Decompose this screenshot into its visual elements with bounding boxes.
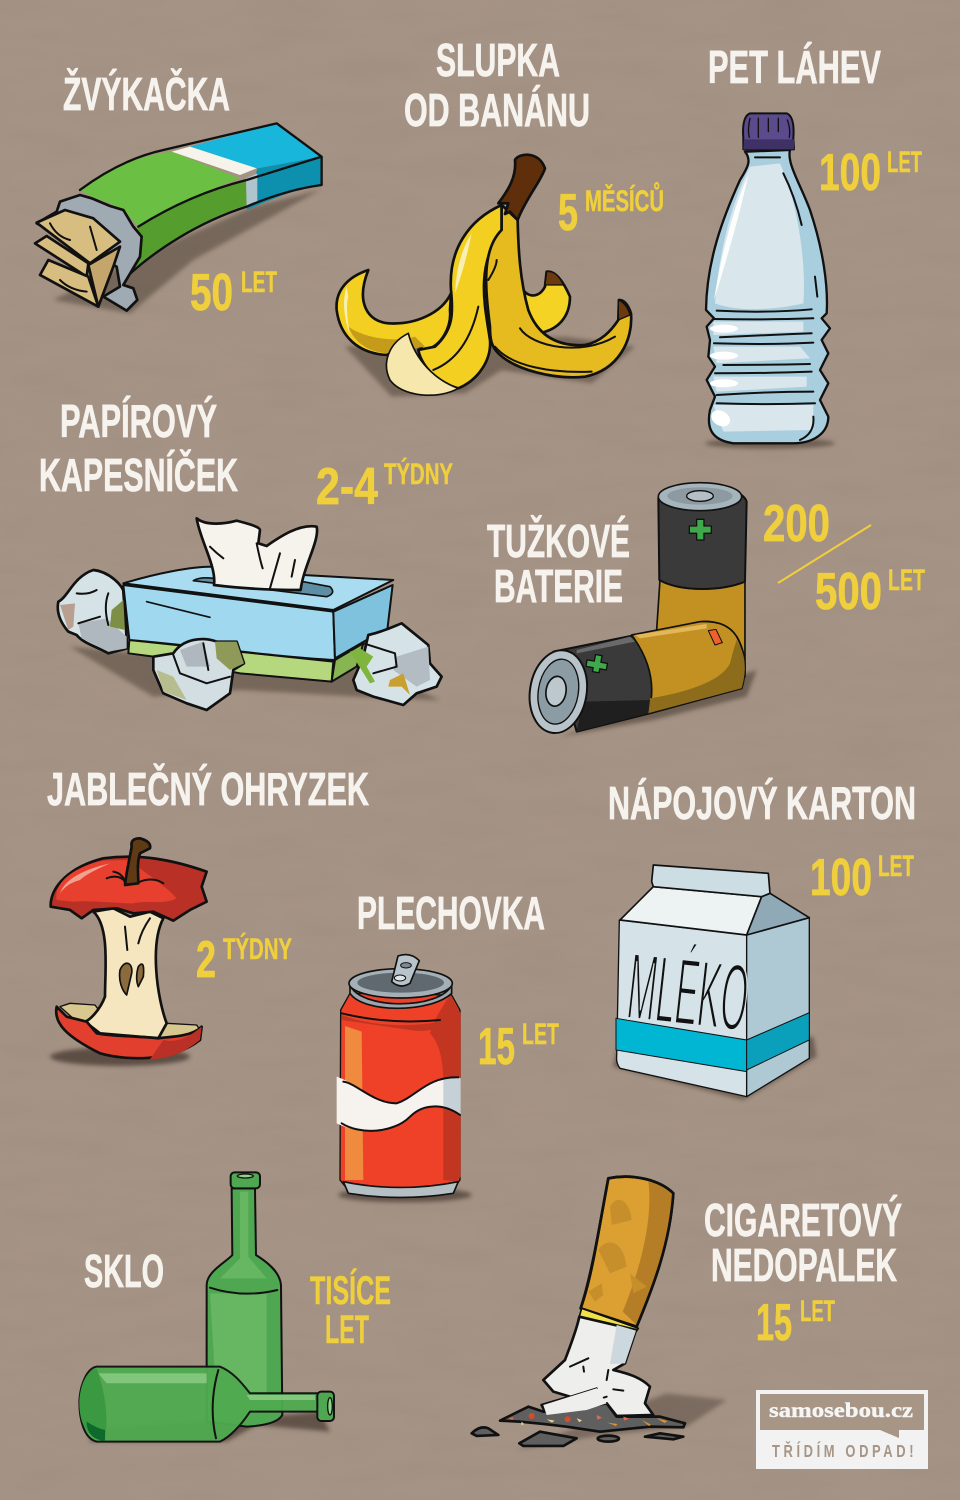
item: tissues <box>39 395 453 710</box>
illustration: tissue box and tissues <box>58 518 442 710</box>
time: 100 let: 100 <box>810 849 872 907</box>
item: cigarette butt <box>472 1177 902 1450</box>
title: Slupka od banánu <box>404 34 590 136</box>
illustration: gum <box>35 123 322 313</box>
illustration: glass bottles <box>79 1172 334 1442</box>
time: 2 týdny <box>196 931 292 989</box>
item: glass bottles <box>79 1172 391 1442</box>
time: 15 let: 15 <box>478 1018 515 1076</box>
illustration: can <box>337 955 472 1202</box>
time: 5 měsíců: 5 <box>558 184 578 242</box>
title: Cigaretový nedopalek <box>704 1194 902 1291</box>
title: Sklo: SKLO <box>84 1245 164 1297</box>
title: Papírový kapesníček: PAPÍROVÝ <box>60 395 217 447</box>
logo: samosebou.cz: TŘÍDÍM ODPAD! <box>772 1440 917 1462</box>
time: 2-4 týdny: TÝDNY <box>384 457 453 491</box>
time: 50 let: 50 <box>190 264 233 322</box>
time: 200 / 500 let: LET <box>888 564 925 597</box>
title: Plechovka: PLECHOVKA <box>357 887 545 939</box>
time: 2-4 týdny <box>316 457 453 516</box>
item: batteries <box>487 483 925 737</box>
logo: samosebou.cz <box>756 1390 928 1469</box>
title: Žvýkačka: ŽVÝKAČKA <box>63 68 230 120</box>
title: Tužkové baterie: TUŽKOVÉ <box>487 515 630 567</box>
time: 100 let: LET <box>887 146 922 179</box>
time: 15 let: LET <box>800 1295 835 1328</box>
item: chewing gum <box>35 68 322 322</box>
time: 5 měsíců <box>558 182 664 242</box>
illustration: bottle <box>705 113 835 449</box>
item: PET bottle <box>705 41 922 449</box>
illustration: batteries <box>524 483 757 737</box>
title: Papírový kapesníček <box>39 395 238 501</box>
title: Jablečný ohryzek: JABLEČNÝ OHRYZEK <box>47 763 369 815</box>
item: drink carton <box>608 777 916 1100</box>
time: 2 týdny: 2 <box>196 931 216 989</box>
time: 200 / 500 let: 200 <box>763 495 830 553</box>
item: banana peel <box>337 34 664 397</box>
time: 2 týdny: TÝDNY <box>223 932 292 966</box>
time: 5 měsíců: MĚSÍCŮ <box>585 182 664 218</box>
illustration: milk carton <box>613 865 817 1100</box>
illustration: apple core <box>50 838 207 1066</box>
illustration: cigarette butt <box>472 1177 727 1450</box>
item: can <box>337 887 559 1202</box>
title: Slupka od banánu: SLUPKA <box>436 34 560 86</box>
time: 200 / 500 let <box>763 495 925 621</box>
title: Papírový kapesníček: KAPESNÍČEK <box>39 449 238 501</box>
item: apple core <box>47 763 369 1066</box>
title: Tužkové baterie: BATERIE <box>494 560 623 612</box>
title: Tužkové baterie <box>487 515 630 612</box>
time: tisíce let <box>310 1268 391 1352</box>
time: 15 let: 15 <box>756 1294 792 1352</box>
time: 200 / 500 let: 500 <box>815 563 882 621</box>
time: tisíce let: LET <box>325 1308 369 1352</box>
time: 2-4 týdny: 2-4 <box>316 458 378 516</box>
title: Slupka od banánu: OD BANÁNU <box>404 84 590 136</box>
time: 50 let <box>190 264 277 322</box>
illustration: banana peel <box>337 155 635 397</box>
time: 100 let: 100 <box>819 144 881 202</box>
item: drink carton: MLÉKO <box>623 934 754 1052</box>
time: tisíce let: TISÍCE <box>310 1268 391 1313</box>
title: PET láhev: PET LÁHEV <box>708 41 881 93</box>
time: 50 let: LET <box>241 266 277 299</box>
time: 100 let: LET <box>878 850 914 883</box>
time: 15 let: LET <box>522 1018 559 1051</box>
logo: samosebou.cz: samosebou.cz <box>769 1398 913 1422</box>
